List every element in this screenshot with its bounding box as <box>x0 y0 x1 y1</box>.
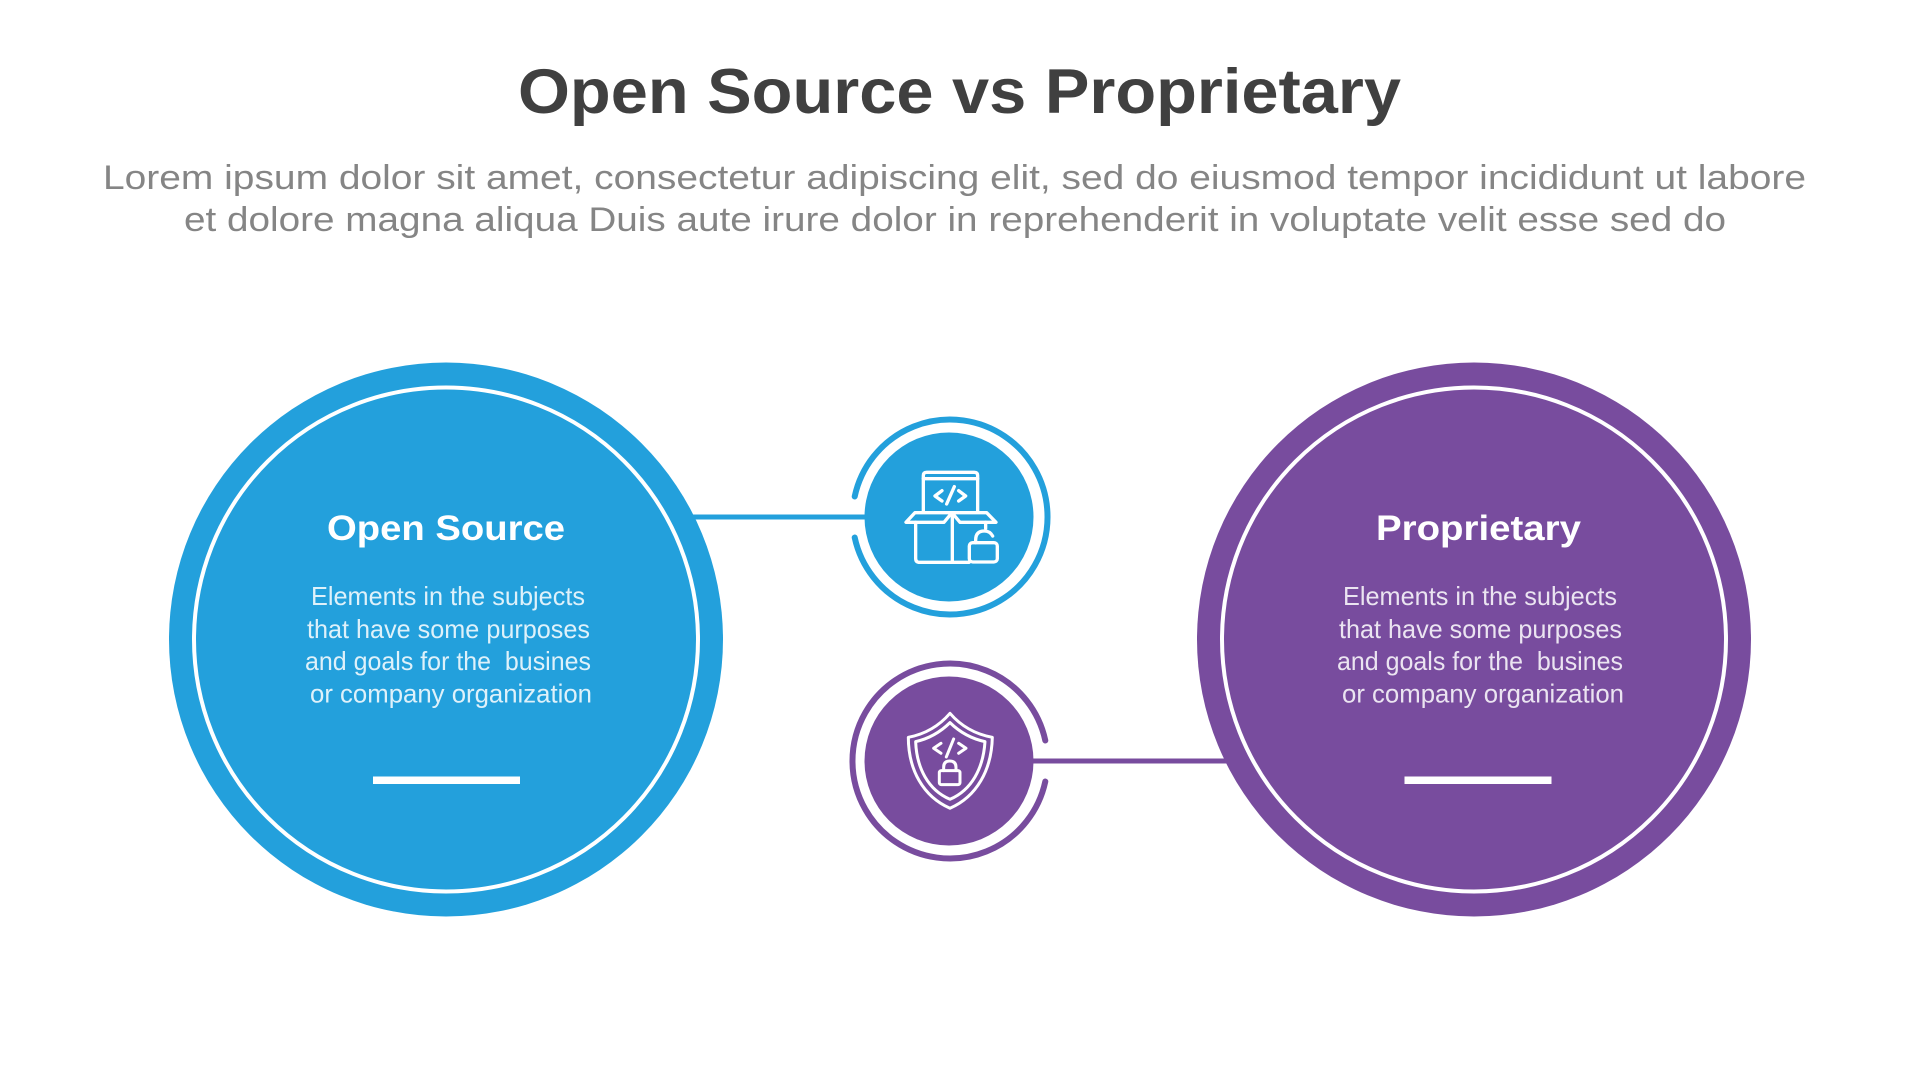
subtitle text block <box>103 159 1806 239</box>
proprietary description: or company organization <box>1342 678 1624 708</box>
panel: proprietary <box>1197 362 1751 916</box>
open source description: Elements in the subjects <box>311 581 585 611</box>
icon: shield with code and padlock <box>908 713 992 808</box>
connector: open source line <box>690 514 870 520</box>
proprietary bar <box>1404 776 1552 784</box>
proprietary circle <box>1197 362 1751 916</box>
connector: proprietary line <box>1030 758 1228 764</box>
open source description <box>305 581 592 708</box>
open source badge disc <box>864 432 1034 602</box>
title: Open Source vs Proprietary <box>518 57 1401 127</box>
proprietary inner ring <box>1222 388 1726 892</box>
proprietary description: that have some purposes <box>1339 614 1622 644</box>
subtitle text block: Lorem ipsum dolor sit amet, consectetur adipiscing elit, sed do eiusmod tempor incididunt ut labore <box>103 159 1806 197</box>
open source description: that have some purposes <box>307 614 590 644</box>
panel: open source <box>169 362 723 916</box>
open source heading: Open Source <box>327 509 565 548</box>
open source description: and goals for the busines <box>305 646 591 676</box>
open source bar <box>373 776 520 784</box>
proprietary description: Elements in the subjects <box>1343 581 1617 611</box>
proprietary description: and goals for the busines <box>1337 646 1623 676</box>
icon: open box with code window and open padlock <box>906 472 997 562</box>
proprietary badge disc <box>864 676 1034 846</box>
node: open source badge <box>855 420 1048 615</box>
open source description: or company organization <box>310 678 592 708</box>
open source circle <box>169 362 723 916</box>
proprietary heading: Proprietary <box>1376 509 1582 548</box>
proprietary description <box>1337 581 1624 708</box>
subtitle text block: et dolore magna aliqua Duis aute irure dolor in reprehenderit in voluptate velit esse sed do <box>184 201 1726 239</box>
open source badge ring <box>855 420 1048 615</box>
node: proprietary badge <box>852 664 1045 858</box>
proprietary badge ring <box>852 664 1045 858</box>
open source inner ring <box>194 388 698 892</box>
